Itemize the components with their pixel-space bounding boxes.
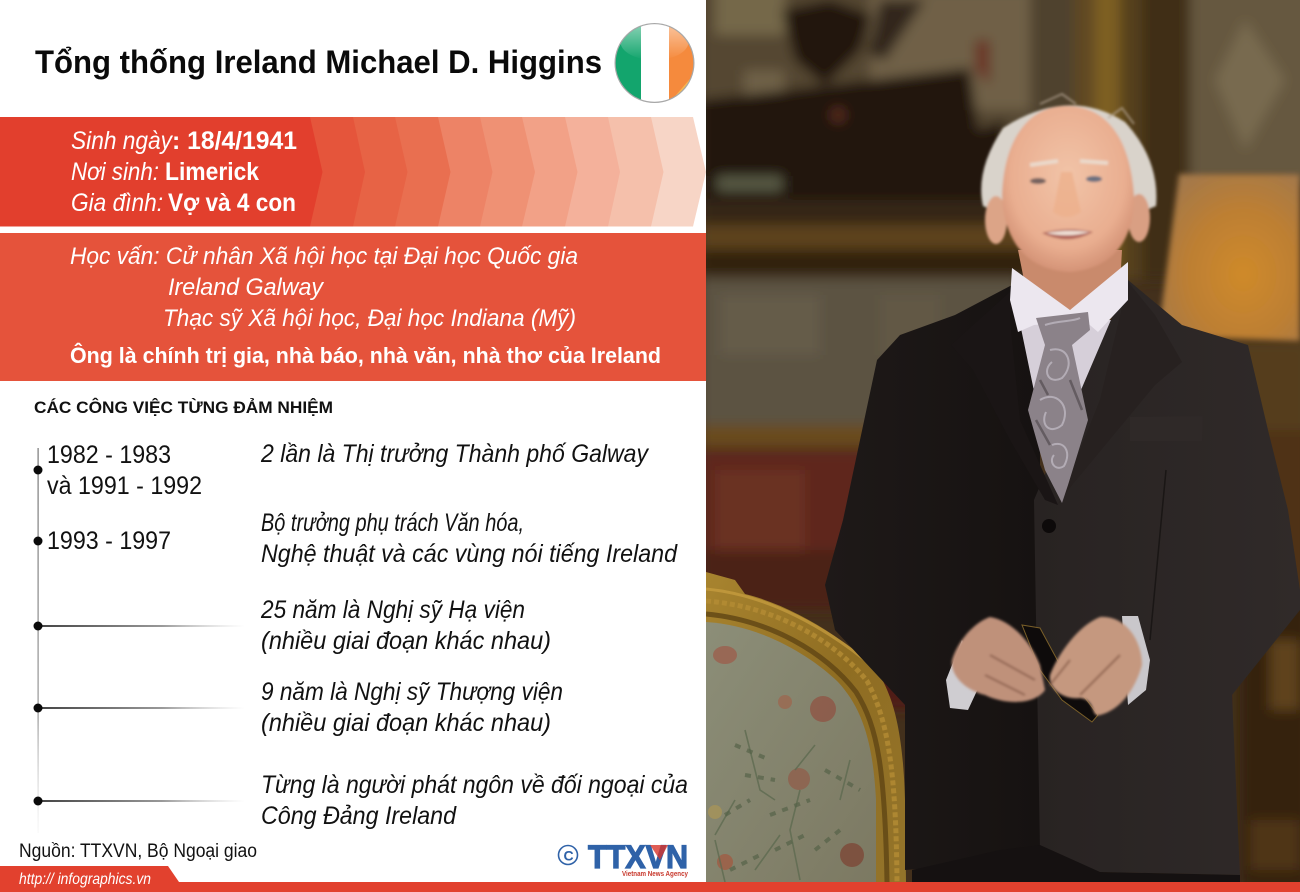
chair fabric: floral motifs: [708, 646, 864, 882]
footer bar with website tab: [0, 866, 1300, 892]
panel: personal details chevron band: [0, 117, 706, 226]
timeline entry 2: Nghệ thuật và các vùng nói tiếng Ireland: [261, 540, 678, 568]
tie with paisley pattern: [1028, 312, 1090, 503]
ears: [985, 196, 1007, 244]
title: Tổng thống Ireland Michael D. Higgins: [35, 44, 602, 80]
logo: TTXVN copyright: TTXVN: [588, 839, 688, 875]
education text: Ireland Galway: [168, 274, 325, 301]
mouth: [1042, 229, 1093, 239]
family: [71, 189, 296, 217]
head: [981, 94, 1156, 272]
photo background: blurred painting, frame, wall and lamp: [700, 0, 1300, 890]
hair: [981, 105, 1156, 216]
timeline entry 2: Bộ trưởng phụ trách Văn hóa,: [261, 509, 524, 537]
timeline entry 3: 25 năm là Nghị sỹ Hạ viện: [260, 596, 525, 624]
education text: [70, 243, 578, 332]
timeline entry 2: [34, 509, 678, 568]
birth date: [71, 127, 297, 155]
trousers: [912, 845, 1240, 882]
education text: Học vấn: Cử nhân Xã hội học tại Đại học Quốc gia: [70, 243, 578, 270]
timeline entry 3: (nhiều giai đoạn khác nhau): [261, 627, 551, 655]
eyeglasses: [1022, 625, 1098, 722]
timeline entry 1: và 1991 - 1992: [47, 472, 202, 500]
family: Vợ và 4 con: [168, 189, 296, 217]
birth date: Sinh ngày: [71, 127, 173, 155]
timeline entry 5: Công Đảng Ireland: [261, 802, 457, 830]
logo: TTXVN copyright: [558, 839, 688, 878]
timeline entry 5: [34, 771, 688, 830]
timeline entry 3: [34, 596, 551, 655]
family: Gia đình:: [71, 189, 163, 217]
photo: upholstered gilt chair: [706, 572, 906, 882]
education text: Thạc sỹ Xã hội học, Đại học Indiana (Mỹ): [163, 305, 576, 332]
timeline entry 4: (nhiều giai đoạn khác nhau): [261, 709, 551, 737]
birth date: : 18/4/1941: [172, 127, 297, 155]
photo: table lamp shade: [1158, 174, 1300, 341]
icon: Irish flag button: [614, 23, 696, 103]
eyes: [1030, 178, 1046, 184]
panel: education band: [0, 233, 706, 381]
left shirt cuff: [946, 640, 977, 710]
birthplace: Nơi sinh:: [71, 158, 159, 186]
profession statement: Ông là chính trị gia, nhà báo, nhà văn, nhà thơ của Ireland: [70, 343, 661, 368]
face: [1002, 106, 1134, 272]
jacket button: [1042, 519, 1056, 533]
birthplace: [71, 158, 259, 186]
jacket: [825, 280, 1300, 882]
heading: career: CÁC CÔNG VIỆC TỪNG ĐẢM NHIỆM: [34, 398, 333, 417]
timeline entry 4: [34, 678, 563, 737]
panel: title row: [35, 23, 696, 103]
hands: [952, 617, 1142, 715]
left lapel: [1039, 465, 1058, 505]
birthplace: Limerick: [165, 158, 259, 186]
neck: [1018, 250, 1122, 310]
eyebrows: [1030, 161, 1108, 165]
source note: Nguồn: TTXVN, Bộ Ngoại giao: [19, 841, 257, 862]
timeline entry 4: 9 năm là Nghị sỹ Thượng viện: [261, 678, 563, 706]
timeline: career history: [34, 440, 688, 833]
timeline entry 5: Từng là người phát ngôn về đối ngoại của: [261, 771, 688, 799]
right lapel: [1058, 282, 1182, 505]
timeline entry 2: 1993 - 1997: [47, 527, 171, 555]
photo: President Michael D. Higgins in a stately room: [700, 0, 1300, 890]
nose: [1053, 172, 1081, 217]
right shirt cuff: [1122, 616, 1150, 705]
timeline entry 1: 2 lần là Thị trưởng Thành phố Galway: [260, 440, 649, 468]
timeline entry 1: 1982 - 1983: [47, 441, 171, 469]
shirt: [1022, 320, 1111, 390]
website url: http:// infographics.vn: [19, 871, 151, 888]
logo: TTXVN copyright: C: [564, 848, 574, 864]
logo: TTXVN copyright: Vietnam News Agency: [622, 871, 688, 878]
timeline entry 1: [34, 440, 649, 500]
photo: the president: [825, 94, 1300, 882]
breast pocket: [1130, 416, 1203, 441]
shirt collar: [1010, 262, 1128, 332]
